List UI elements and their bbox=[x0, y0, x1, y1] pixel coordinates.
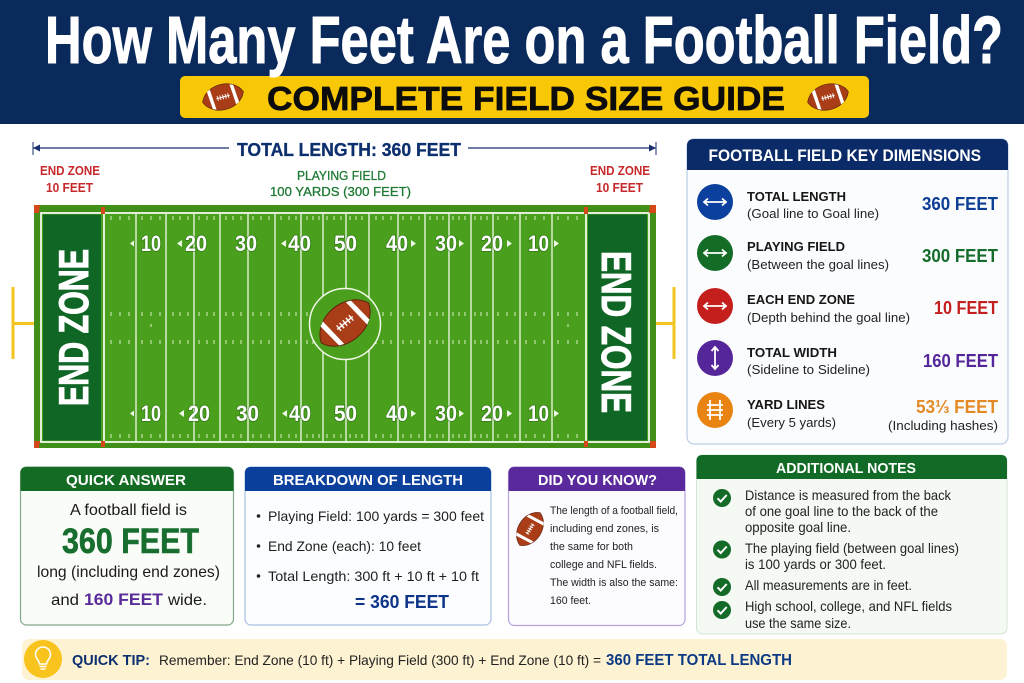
note 1 bbox=[713, 488, 951, 535]
top yard numbers: 20 bbox=[185, 231, 207, 256]
panel: quick answer: A football field is bbox=[70, 502, 187, 519]
icon: light bulb bbox=[24, 640, 62, 678]
fact text: including end zones, is bbox=[550, 523, 660, 535]
panel: breakdown of length: Total Length: 300 ft + 10 ft + 10 ft bbox=[268, 568, 479, 584]
fact text: 160 feet. bbox=[550, 595, 591, 607]
row: yard lines: 53⅓ FEET bbox=[916, 396, 999, 417]
fact text: the same for both bbox=[550, 541, 633, 553]
end zone left bbox=[43, 214, 101, 440]
fact text: The length of a football field, bbox=[550, 505, 678, 517]
row: playing field: (Between the goal lines) bbox=[747, 257, 889, 272]
top yard numbers: 50 bbox=[334, 231, 357, 256]
row: each end zone bbox=[697, 288, 999, 325]
panel: breakdown of length: End Zone (each): 10 feet bbox=[268, 538, 421, 554]
panel: key dimensions: FOOTBALL FIELD KEY DIMENSIONS bbox=[708, 147, 981, 165]
quick tip bar bbox=[22, 639, 1007, 680]
panel: quick answer: and bbox=[51, 592, 79, 609]
label: playing field bbox=[270, 168, 411, 199]
top yard numbers: 30 bbox=[235, 231, 257, 256]
panel: quick answer: long (including end zones) bbox=[37, 564, 220, 581]
row: total length: 360 FEET bbox=[922, 193, 999, 214]
row: yard lines bbox=[697, 392, 999, 433]
label: left end zone: END ZONE bbox=[40, 163, 100, 178]
bottom yard numbers: 20 bbox=[188, 401, 210, 426]
row: yard lines: (Including hashes) bbox=[888, 418, 998, 433]
corner pylons bbox=[34, 205, 656, 448]
row: total length bbox=[697, 184, 999, 221]
row: total length: TOTAL LENGTH bbox=[747, 189, 846, 204]
panel: breakdown of length: BREAKDOWN OF LENGTH bbox=[273, 472, 463, 489]
bottom yard numbers bbox=[130, 401, 559, 426]
label: left end zone bbox=[40, 163, 100, 195]
panel: key dimensions bbox=[687, 139, 1008, 444]
panel: quick answer: 160 FEET bbox=[84, 590, 164, 609]
panel: did you know bbox=[508, 467, 685, 626]
row: each end zone: (Depth behind the goal line) bbox=[747, 310, 910, 325]
row: total width: 160 FEET bbox=[923, 350, 999, 371]
fact text: college and NFL fields. bbox=[550, 559, 657, 571]
panel: breakdown of length: Playing Field: 100 yards = 300 feet bbox=[268, 508, 484, 524]
note 1: Distance is measured from the back bbox=[745, 488, 951, 503]
subtitle banner: COMPLETE FIELD SIZE GUIDE bbox=[267, 81, 785, 118]
end zone left: END ZONE bbox=[50, 249, 97, 406]
bottom yard numbers: 20 bbox=[481, 401, 503, 426]
row: each end zone: 10 FEET bbox=[934, 297, 999, 318]
icon: football left bbox=[199, 79, 247, 115]
fact text: The width is also the same: bbox=[550, 577, 678, 589]
row: total length: (Goal line to Goal line) bbox=[747, 206, 879, 221]
bottom yard numbers: 30 bbox=[236, 401, 259, 426]
row: yard lines: (Every 5 yards) bbox=[747, 415, 836, 430]
top yard numbers: 20 bbox=[481, 231, 503, 256]
fact text bbox=[550, 505, 678, 607]
bottom yard numbers: 30 bbox=[435, 401, 457, 426]
bottom yard numbers: 40 bbox=[289, 401, 311, 426]
panel: quick answer: wide. bbox=[167, 592, 207, 609]
label: playing field: 100 YARDS (300 FEET) bbox=[270, 184, 411, 199]
row: total width: (Sideline to Sideline) bbox=[747, 362, 870, 377]
row: yard lines: YARD LINES bbox=[747, 397, 825, 412]
note 2: The playing field (between goal lines) bbox=[745, 541, 959, 556]
label: left end zone: 10 FEET bbox=[46, 180, 93, 195]
goalpost right bbox=[648, 287, 674, 359]
bottom yard numbers: 40 bbox=[386, 401, 408, 426]
quick tip bar: Remember: End Zone (10 ft) + Playing Field (300 ft) + End Zone (10 ft) = bbox=[159, 652, 601, 668]
panel: quick answer: 360 FEET bbox=[62, 522, 199, 561]
label: right end zone bbox=[590, 163, 650, 195]
note 4 bbox=[713, 599, 952, 631]
note 3: All measurements are in feet. bbox=[745, 578, 912, 593]
field boundary and yard lines bbox=[41, 213, 649, 442]
note 2: is 100 yards or 300 feet. bbox=[745, 557, 886, 572]
total length dimension arrow bbox=[33, 139, 656, 160]
panel: additional notes: ADDITIONAL NOTES bbox=[776, 460, 916, 477]
panel: did you know: DID YOU KNOW? bbox=[538, 472, 657, 489]
panel: additional notes bbox=[696, 455, 1007, 634]
total length dimension arrow: TOTAL LENGTH: 360 FEET bbox=[237, 139, 462, 160]
row: playing field: 300 FEET bbox=[922, 245, 999, 266]
bottom yard numbers: 10 bbox=[528, 401, 549, 426]
football field diagram bbox=[34, 205, 656, 448]
top yard numbers bbox=[130, 231, 559, 256]
panel: quick answer: QUICK ANSWER bbox=[66, 472, 186, 489]
top yard numbers: 30 bbox=[435, 231, 457, 256]
icon: football bbox=[510, 507, 550, 551]
note 2 bbox=[713, 540, 959, 572]
top yard numbers: 40 bbox=[386, 231, 408, 256]
row: playing field: PLAYING FIELD bbox=[747, 239, 845, 254]
row: total width: TOTAL WIDTH bbox=[747, 345, 837, 360]
panel: quick answer bbox=[20, 467, 234, 625]
icon: football right bbox=[804, 79, 852, 115]
label: right end zone: 10 FEET bbox=[596, 180, 643, 195]
goalpost left bbox=[13, 287, 42, 359]
quick tip bar: 360 FEET TOTAL LENGTH bbox=[606, 652, 792, 669]
note 4: use the same size. bbox=[745, 616, 851, 631]
note 1: opposite goal line. bbox=[745, 520, 851, 535]
note 1: of one goal line to the back of the bbox=[745, 504, 938, 519]
note 4: High school, college, and NFL fields bbox=[745, 599, 952, 614]
panel: breakdown of length bbox=[245, 467, 491, 625]
label: playing field: PLAYING FIELD bbox=[297, 168, 386, 183]
center circle with football bbox=[309, 288, 381, 360]
header band bbox=[0, 0, 1024, 124]
row: total width bbox=[697, 340, 999, 377]
top yard numbers: 40 bbox=[288, 231, 311, 256]
end zone right: END ZONE bbox=[593, 251, 640, 413]
panel: breakdown of length: = 360 FEET bbox=[355, 592, 449, 612]
quick tip bar: QUICK TIP: bbox=[72, 652, 150, 669]
note 3 bbox=[713, 578, 912, 596]
top yard numbers: 10 bbox=[528, 231, 549, 256]
bottom yard numbers: 10 bbox=[141, 401, 161, 426]
hash marks bbox=[111, 216, 577, 438]
row: playing field bbox=[697, 235, 999, 272]
end zone right bbox=[588, 214, 647, 440]
row: each end zone: EACH END ZONE bbox=[747, 292, 855, 307]
top yard numbers: 10 bbox=[141, 231, 161, 256]
subtitle banner bbox=[180, 76, 869, 118]
label: right end zone: END ZONE bbox=[590, 163, 650, 178]
bottom yard numbers: 50 bbox=[334, 401, 357, 426]
